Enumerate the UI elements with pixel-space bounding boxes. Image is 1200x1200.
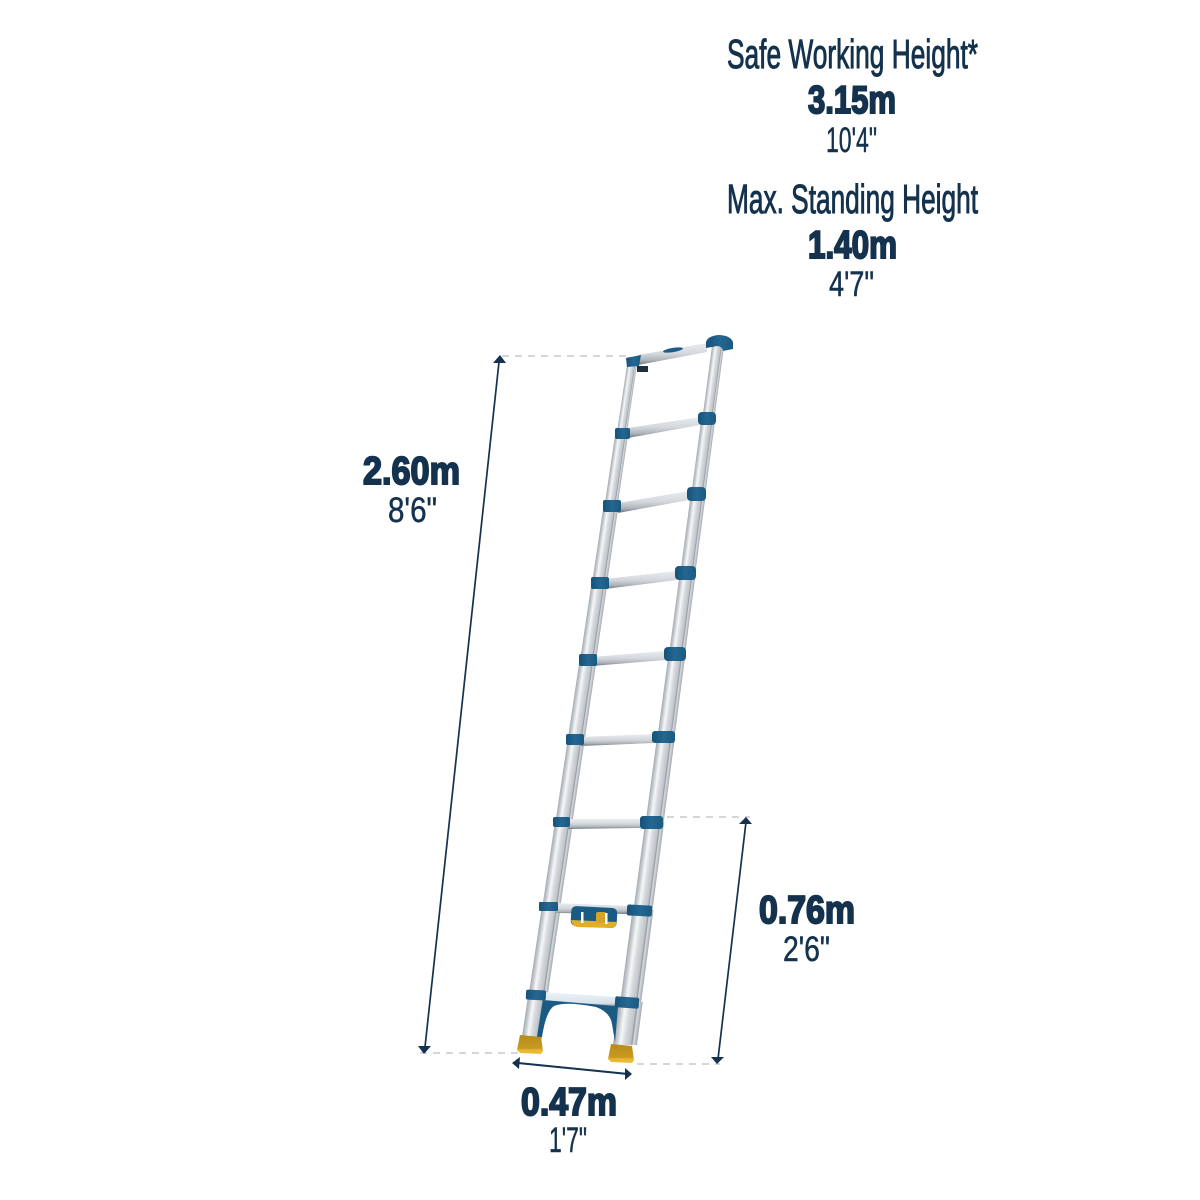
imperial value: 8'6": [388, 491, 437, 530]
rungs: [543, 343, 707, 1006]
label: ladder width: [521, 1081, 617, 1160]
logo badge: [663, 346, 683, 354]
metric value: 0.76m: [759, 889, 855, 932]
imperial value: 2'6": [783, 930, 830, 969]
rail clamps: [526, 335, 733, 1009]
heading: Safe Working Height*: [727, 31, 978, 77]
label: rung spacing: [759, 889, 855, 969]
right rail: [613, 345, 730, 1045]
metric value: 2.60m: [363, 450, 460, 493]
imperial value: 10'4": [826, 121, 877, 160]
label: ladder height: [363, 450, 460, 530]
base bracket: [537, 999, 618, 1042]
width dimension line: [512, 1057, 632, 1080]
top hinge: [637, 366, 648, 372]
left foot: [517, 1035, 543, 1054]
imperial value: 4'7": [829, 265, 874, 304]
closed-rung spacing dimension line: [637, 817, 752, 1064]
imperial value: 1'7": [549, 1121, 587, 1160]
height dimension line: [418, 355, 628, 1054]
carry handle: [571, 906, 617, 928]
left rail: [521, 357, 643, 1040]
metric value: 0.47m: [521, 1081, 617, 1124]
spec: safe working height: [727, 31, 978, 160]
spec: max standing height: [727, 176, 978, 304]
ladder: [517, 335, 733, 1063]
heading: Max. Standing Height: [727, 176, 978, 222]
metric value: 1.40m: [808, 224, 897, 267]
metric value: 3.15m: [808, 79, 896, 122]
right foot: [608, 1044, 634, 1063]
